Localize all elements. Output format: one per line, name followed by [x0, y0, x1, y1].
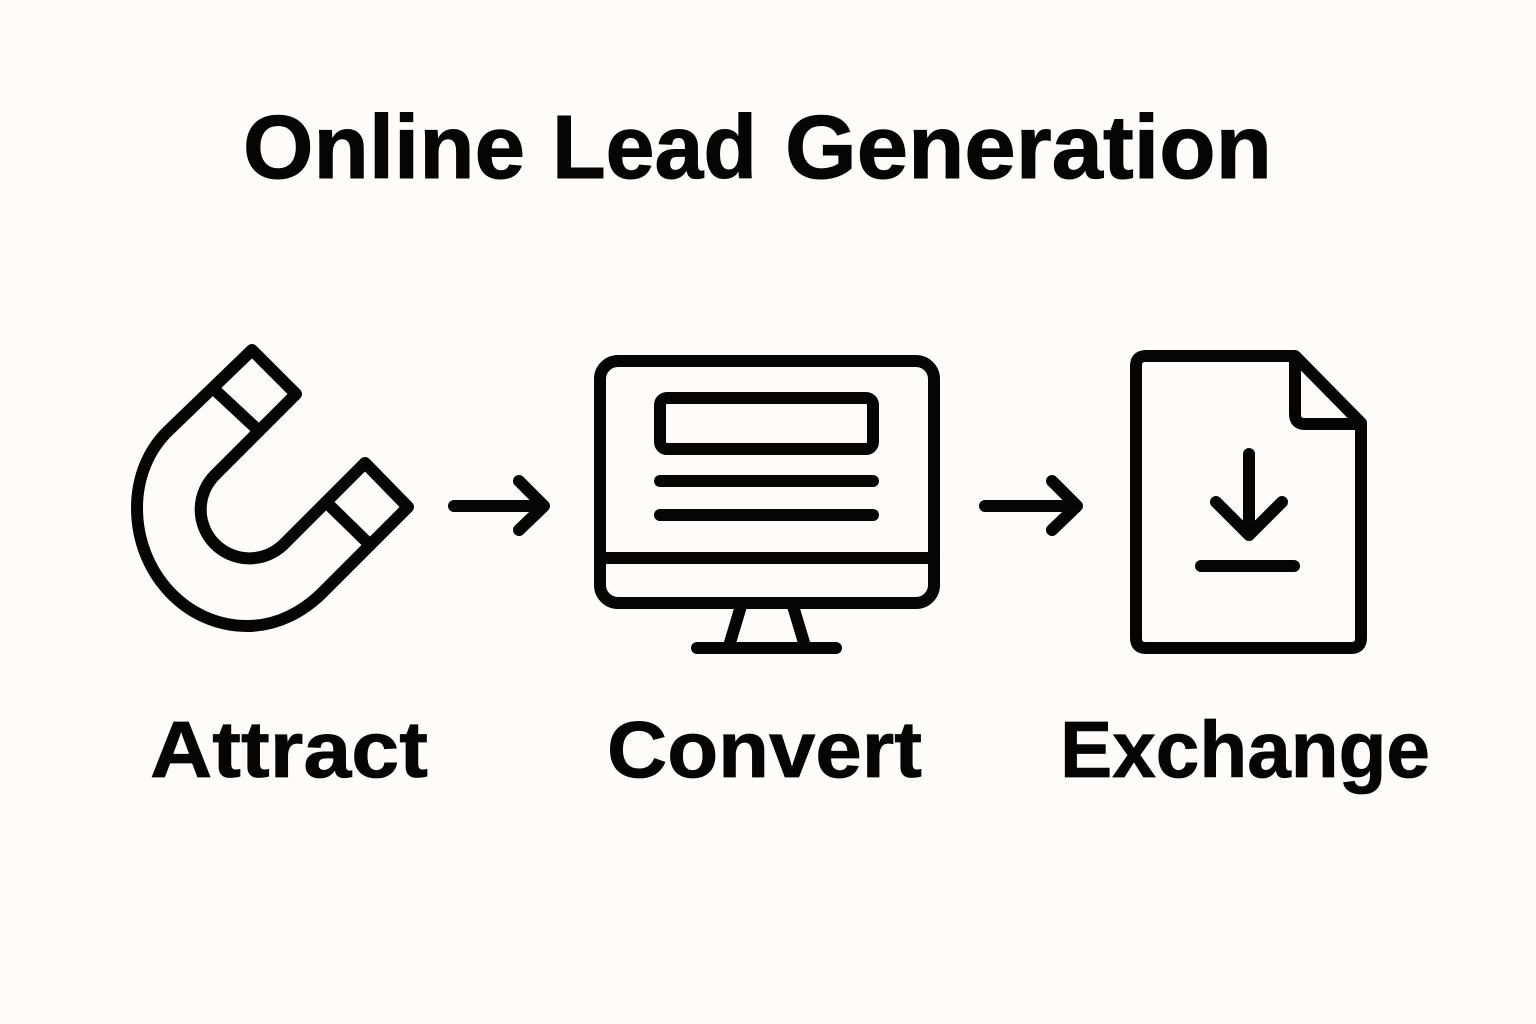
title [243, 98, 1272, 198]
arrow: convert to exchange [985, 481, 1077, 530]
label: Convert: Convert [607, 705, 922, 794]
label: Exchange: Exchange [1060, 705, 1430, 794]
title: Online [243, 98, 525, 198]
title: Generation [785, 98, 1272, 198]
arrow: attract to convert [454, 481, 544, 530]
title: Lead [552, 98, 757, 198]
icon: magnet [137, 350, 408, 626]
icon: document with download [1136, 356, 1361, 648]
icon: computer monitor with form [600, 361, 934, 648]
label: Attract: Attract [150, 705, 428, 794]
